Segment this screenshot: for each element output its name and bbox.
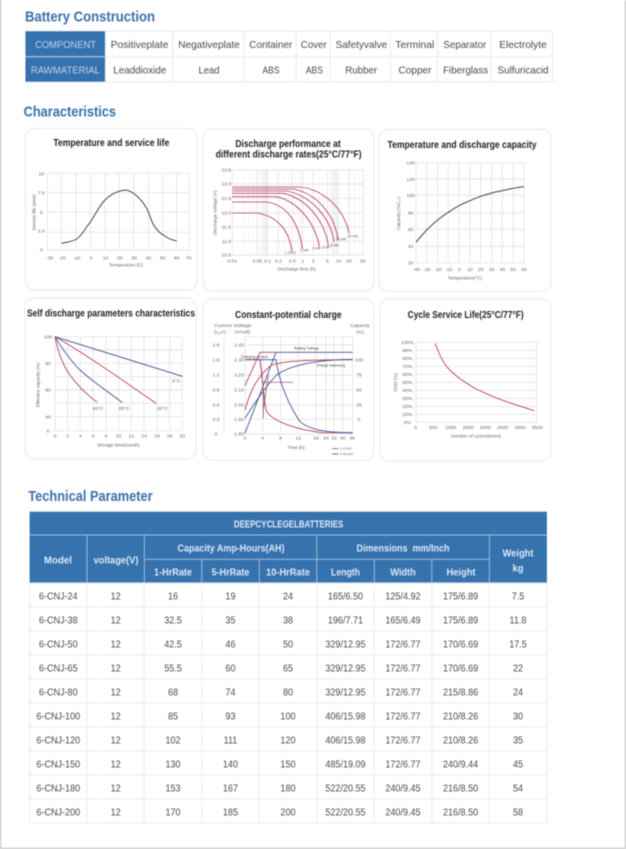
heading: Battery Construction: Battery Construction — [25, 8, 155, 26]
legend: 0.25C10A — [340, 452, 353, 456]
line chart: 30 — [489, 267, 495, 273]
table rows: 172/6.77 — [385, 639, 421, 651]
line chart: 100 — [355, 357, 363, 363]
table rows: 102 — [166, 735, 181, 747]
line chart: Storage time(month) — [97, 443, 140, 448]
heading: Technical Parameter: Technical Parameter — [28, 488, 153, 505]
line chart: Capacity (%C₁₀) — [396, 196, 401, 230]
row: raw material: Leaddioxide — [113, 65, 166, 77]
table header: 5-HrRate — [212, 566, 250, 578]
table rows: 130 — [166, 759, 181, 771]
line chart: 40 — [340, 436, 346, 442]
line chart: 20% — [402, 404, 413, 410]
table rows: 6-CNJ-38 — [39, 615, 78, 627]
row: raw material: Lead — [198, 65, 220, 77]
table rows: 6-CNJ-180 — [36, 783, 81, 795]
row: raw material: RAWMATERIAL — [31, 65, 100, 77]
line chart: 40°C — [92, 406, 104, 412]
line chart: 20 — [180, 434, 185, 440]
line chart: (%) — [356, 329, 364, 335]
line chart: Number of cycles(times) — [451, 434, 502, 439]
table rows: 170/6.69 — [443, 639, 478, 651]
line chart: 2.10 — [234, 387, 244, 393]
line chart: 3500 — [532, 425, 543, 431]
line chart: 16 — [154, 434, 160, 440]
line chart: 1.8 — [213, 342, 220, 348]
table rows: 406/15.98 — [325, 735, 366, 747]
line chart: -30 — [423, 267, 431, 273]
line chart: 5 — [40, 210, 43, 216]
line chart: 1.2 — [213, 372, 220, 378]
table rows: 80 — [283, 687, 294, 699]
line chart: 50 — [160, 255, 166, 261]
line chart: DOD (%) — [393, 372, 398, 392]
line chart: -20 — [59, 255, 66, 261]
line chart: 10 — [39, 171, 44, 177]
line chart: 8 — [279, 436, 282, 442]
line chart: Battery Voltage — [294, 347, 319, 351]
row: component — [35, 39, 547, 51]
table rows: 6-CNJ-80 — [39, 687, 78, 699]
line chart: 140 — [407, 161, 415, 167]
line chart: 60 — [45, 388, 51, 394]
line chart: 7.5 — [38, 190, 45, 196]
line chart: 30°C — [118, 406, 130, 412]
table header: Width — [390, 566, 416, 578]
line chart: discharge curves: 2 — [312, 258, 315, 264]
line chart: 2.30 — [234, 357, 244, 363]
line chart: 1.5 — [213, 357, 220, 363]
table rows: 329/12.95 — [325, 639, 366, 651]
table rows: 24 — [513, 687, 524, 699]
line chart: 0% — [404, 420, 411, 426]
line chart: 60 — [521, 267, 527, 273]
line chart: 20 — [408, 260, 414, 266]
line chart: Time (h) — [287, 445, 305, 450]
line chart: 2 — [66, 434, 69, 440]
table rows: 172/6.77 — [385, 735, 421, 747]
line chart: 100 — [407, 193, 415, 199]
row: component: Electrolyte — [499, 39, 547, 51]
line chart — [396, 161, 527, 281]
row: component: Negativeplate — [178, 39, 240, 51]
table rows: 175/6.89 — [443, 615, 478, 627]
table rows: 150 — [280, 759, 296, 771]
table rows: 175/6.89 — [443, 591, 478, 603]
row: component: Cover — [301, 39, 327, 51]
line chart: 80 — [45, 361, 51, 367]
table rows: 196/7.71 — [328, 615, 363, 627]
table rows: 172/6.77 — [385, 663, 421, 675]
table rows: 58 — [513, 807, 523, 819]
line chart: 40 — [45, 414, 51, 420]
table rows: 12 — [111, 759, 121, 771]
line chart: 70 — [186, 255, 192, 261]
line chart: 10 — [467, 267, 473, 273]
line chart: discharge curves: 20 — [346, 258, 352, 264]
line chart: discharge curves: 12.5 — [221, 196, 231, 202]
table header: Dimensions mm/Inch — [356, 543, 450, 555]
line chart: discharge curves: 0.01 — [227, 258, 237, 264]
line chart: discharge curves: 2 HR — [312, 247, 321, 251]
table rows: 42.5 — [164, 639, 182, 651]
line chart: discharge curves: 1.75 H — [285, 251, 296, 255]
line chart: 24 — [323, 436, 329, 442]
table rows: 35 — [513, 735, 523, 747]
table rows: 240/9.44 — [443, 759, 479, 771]
table rows: 17.5 — [509, 639, 527, 651]
table rows: 46 — [225, 639, 235, 651]
line chart — [36, 334, 185, 448]
table rows: 6-CNJ-65 — [39, 663, 78, 675]
line chart: 75 — [356, 372, 362, 378]
line chart: discharge curves: 0.5 — [289, 258, 296, 264]
line chart: discharge curves — [213, 168, 366, 271]
line chart: 120 — [407, 177, 415, 183]
line chart: discharge curves: Discharge time (h) — [278, 266, 316, 271]
line chart: -10 — [445, 267, 452, 273]
line chart: discharge curves: 3 HR — [322, 246, 331, 250]
line chart: 12 — [296, 436, 301, 442]
row: component: Separator — [443, 39, 487, 51]
table rows: 240/9.45 — [385, 807, 421, 819]
table rows: 6-CNJ-200 — [36, 807, 81, 819]
line chart: 12 — [129, 434, 134, 440]
row: raw material: Rubber — [345, 65, 378, 77]
line chart: 90% — [402, 348, 413, 354]
line chart: 50 — [510, 267, 516, 273]
line chart: 2500 — [497, 425, 508, 431]
table rows: 140 — [223, 759, 239, 771]
line chart: discharge curves: 20 HR — [347, 235, 358, 239]
table rows: 210/8.26 — [443, 711, 478, 723]
table rows: 111 — [224, 735, 237, 747]
table rows: 74 — [225, 687, 236, 699]
chart title: Temperature and discharge capacity — [387, 140, 537, 151]
line chart: -40 — [413, 267, 420, 273]
line chart: 4 — [79, 434, 82, 440]
table rows: 120 — [280, 735, 296, 747]
table rows: 167 — [223, 783, 238, 795]
line chart: 18 — [167, 434, 173, 440]
line chart: 40 — [146, 255, 151, 261]
table header: 10-HrRate — [266, 566, 310, 578]
panel: self discharge — [25, 298, 196, 459]
line chart — [213, 323, 370, 450]
row: component: Container — [249, 39, 293, 51]
table: battery construction — [26, 31, 552, 82]
row: raw material: ABS — [306, 65, 323, 77]
line chart: discharge curves: 10 — [336, 258, 342, 264]
table rows: 215/8.86 — [443, 687, 478, 699]
table header: Weight — [502, 547, 534, 559]
line chart: 1000 — [445, 425, 456, 431]
line chart: 2.5 — [38, 229, 45, 235]
panel: discharge performance — [203, 129, 374, 291]
line chart: 2.20 — [234, 372, 244, 378]
table rows: 6-CNJ-100 — [36, 711, 81, 723]
line chart: discharge curves: 0.05 — [252, 258, 262, 264]
line chart: 3000 — [514, 425, 526, 431]
line chart: 8 — [105, 434, 108, 440]
row: raw material: ABS — [262, 65, 280, 77]
table rows: 200 — [280, 807, 296, 819]
table rows: 7.5 — [512, 591, 524, 603]
table rows: 12 — [111, 807, 121, 819]
table rows: 30 — [513, 711, 524, 723]
table rows: 50 — [283, 639, 294, 651]
line chart: 0.3 — [213, 417, 220, 423]
line chart: -30 — [46, 255, 53, 261]
table rows: 522/20.55 — [325, 807, 366, 819]
table rows: 180 — [280, 783, 296, 795]
line chart: 4 — [261, 436, 264, 442]
table rows: 35 — [225, 615, 235, 627]
table rows: 55.5 — [164, 663, 182, 675]
line chart: -10 — [73, 255, 80, 261]
chart title: Self discharge parameters characteristics — [27, 309, 195, 320]
line chart: 50 — [356, 387, 362, 393]
row: raw material — [31, 65, 549, 77]
line chart — [393, 340, 543, 439]
line chart: discharge curves: 0.1 — [264, 258, 271, 264]
line chart: 20 — [478, 267, 484, 273]
table rows: 125/4.92 — [385, 591, 421, 603]
legend — [332, 447, 353, 456]
line chart: 2.00 — [234, 402, 244, 408]
row: raw material: Sulfuricacid — [498, 65, 549, 77]
panel: constant-potential charge — [203, 299, 374, 460]
chart title — [216, 139, 362, 161]
row: raw material: Copper — [398, 65, 432, 77]
line chart: Temperature(°C) — [448, 276, 483, 281]
table rows: 240/9.45 — [385, 783, 421, 795]
table rows: 216/8.50 — [443, 783, 479, 795]
heading: Characteristics: Characteristics — [24, 104, 116, 120]
table rows: 185 — [223, 807, 238, 819]
line chart: 100% — [401, 340, 414, 346]
line chart: discharge curves: 5 — [326, 258, 329, 264]
line chart: 100 — [44, 334, 52, 340]
line chart: discharge curves: 1 — [301, 258, 304, 264]
table rows: 172/6.77 — [385, 759, 421, 771]
panel: cycle service life — [380, 299, 551, 461]
line chart: Charge balancing — [316, 363, 345, 367]
table rows: 165/6.49 — [385, 615, 421, 627]
line chart: 2000 — [480, 425, 491, 431]
line chart: 10 — [116, 434, 122, 440]
line chart: 70% — [402, 364, 413, 370]
line chart: 80% — [402, 356, 413, 362]
line chart: discharge curves: 5 HR — [330, 243, 339, 247]
table rows: 172/6.77 — [385, 687, 421, 699]
line chart: Charging current — [241, 355, 268, 359]
line chart: 1500 — [462, 425, 474, 431]
line chart: Current Voltage — [214, 323, 252, 329]
line chart — [32, 171, 192, 268]
table rows: 6-CNJ-120 — [36, 735, 81, 747]
row: component: Safetyvalve — [336, 39, 387, 51]
line chart: 50% — [402, 380, 413, 386]
table rows: 12 — [111, 711, 121, 723]
line chart: 6 — [92, 434, 95, 440]
table rows: 11.8 — [510, 615, 526, 627]
table rows: 6-CNJ-24 — [39, 591, 78, 603]
line chart: 80 — [408, 210, 414, 216]
table rows: 6-CNJ-150 — [36, 759, 81, 771]
line chart: (I₁₀A) — [214, 329, 226, 335]
legend: 0.1C10A — [340, 447, 352, 451]
table rows: 153 — [166, 783, 181, 795]
line chart: 40% — [402, 388, 413, 394]
table rows: 485/19.09 — [325, 759, 366, 771]
line chart: 2.40 — [234, 342, 244, 348]
table rows: 93 — [225, 711, 235, 723]
line chart: 40 — [408, 244, 414, 250]
line chart: 0 — [47, 428, 50, 434]
table rows: 12 — [111, 735, 121, 747]
table rows: 85 — [168, 711, 178, 723]
table rows: 165/6.50 — [328, 591, 364, 603]
table rows: 24 — [283, 591, 294, 603]
line chart: Temperature (C) — [109, 263, 143, 268]
table rows: 329/12.95 — [325, 663, 366, 675]
table rows: 22 — [513, 663, 523, 675]
table header: DEEPCYCLEGELBATTERIES — [234, 518, 343, 530]
chart title: Discharge performance at — [235, 139, 341, 150]
table rows: 170 — [166, 807, 181, 819]
line chart: Capacity — [350, 323, 370, 329]
chart title: Temperature and service life — [53, 138, 170, 149]
table rows: 100 — [280, 711, 296, 723]
line chart: 500 — [429, 425, 438, 431]
line chart: discharge curves: 10 HR — [336, 238, 347, 242]
line chart: 5°C — [172, 379, 181, 385]
table header: Length — [331, 566, 360, 578]
line chart: 0 — [215, 432, 218, 438]
line chart: 16 — [313, 436, 319, 442]
chart title: Cycle Service Life(25°C/77°F) — [408, 310, 524, 321]
table rows: 32.5 — [164, 615, 182, 627]
line chart: 0.9 — [213, 387, 220, 393]
table header: Height — [446, 566, 476, 578]
line chart: 0 — [90, 255, 93, 261]
line chart: 32 — [331, 436, 337, 442]
line chart: Service life (year) — [32, 194, 37, 230]
row: component: Positiveplate — [111, 39, 169, 51]
table rows: 12 — [111, 687, 121, 699]
table rows: 12 — [111, 663, 121, 675]
table header: Model — [44, 555, 72, 567]
table rows: 12 — [111, 591, 121, 603]
line chart: 40 — [500, 267, 505, 273]
line chart: 1.90 — [234, 417, 244, 423]
line chart: discharge curves: 0.2 — [275, 258, 282, 264]
line chart: 30% — [402, 396, 413, 402]
line chart: discharge curves: 12.0 — [221, 210, 231, 216]
line chart: discharge curves: 11.5 — [222, 225, 231, 231]
table rows: 406/15.98 — [325, 711, 366, 723]
table rows: 54 — [513, 783, 524, 795]
table: technical parameter — [30, 512, 547, 823]
line chart: discharge curves: 13.5 — [221, 168, 231, 174]
line chart: 1.80 — [234, 432, 244, 438]
row: component: Terminal — [395, 39, 434, 51]
table rows: 210/8.26 — [443, 735, 478, 747]
line chart: 0.6 — [213, 402, 220, 408]
line chart: 0 — [244, 436, 247, 442]
line chart: 25 — [356, 402, 362, 408]
line chart: 30 — [131, 255, 137, 261]
line chart: (V/cell) — [235, 329, 251, 335]
line chart: discharge curves: 1 HR — [300, 249, 309, 253]
table rows: 12 — [111, 783, 121, 795]
table rows: 12 — [111, 639, 121, 651]
table rows: 60 — [225, 663, 236, 675]
table rows: 12 — [111, 615, 121, 627]
table rows: 65 — [283, 663, 293, 675]
table header — [30, 512, 547, 583]
line chart: 0 — [54, 434, 57, 440]
table rows: 38 — [283, 615, 293, 627]
line chart: 20°C — [157, 406, 169, 412]
line chart: Effective capacity (%) — [36, 362, 41, 407]
line chart: 10 — [103, 255, 109, 261]
line chart: 60 — [408, 227, 414, 233]
table rows: 19 — [225, 591, 235, 603]
line chart: 48 — [349, 436, 355, 442]
table header: voltage(V) — [94, 555, 138, 567]
line chart: 0 — [40, 248, 43, 254]
line chart: discharge curves: 11.0 — [222, 239, 231, 245]
panel: temperature and discharge capacity — [379, 130, 551, 292]
line chart: 60% — [402, 372, 413, 378]
line chart: discharge curves: Discharge voltage (V) — [213, 190, 218, 235]
table rows — [36, 591, 527, 819]
line chart: 10% — [402, 412, 413, 418]
line chart: discharge curves: 50 — [360, 258, 366, 264]
line chart: discharge curves: 10.5 — [221, 253, 231, 259]
table rows: 68 — [168, 687, 178, 699]
line chart: -20 — [434, 267, 442, 273]
panel: temperature and service life — [26, 128, 197, 290]
table rows: 6-CNJ-50 — [39, 639, 78, 651]
table rows: 172/6.77 — [385, 711, 421, 723]
line chart: 60 — [174, 255, 180, 261]
chart title: different discharge rates(25°C/77°F) — [216, 150, 362, 161]
line chart: discharge curves: 13.0 — [221, 182, 231, 188]
chart title: Constant-potential charge — [235, 310, 342, 321]
table rows: 45 — [513, 759, 523, 771]
line chart: 0 — [458, 267, 461, 273]
table rows: 16 — [168, 591, 178, 603]
line chart: 14 — [141, 434, 147, 440]
table rows: 522/20.55 — [325, 783, 366, 795]
row: component: COMPONENT — [35, 39, 97, 51]
table header: kg — [512, 563, 524, 575]
table rows: 216/8.50 — [443, 807, 479, 819]
table rows: 170/6.69 — [443, 663, 478, 675]
line chart: 0 — [414, 425, 417, 431]
table rows: 329/12.95 — [325, 687, 366, 699]
row: raw material: Fiberglass — [443, 65, 488, 77]
line chart: 0 — [358, 417, 361, 423]
table header: 1-HrRate — [154, 566, 192, 578]
table header: Capacity Amp-Hours(AH) — [178, 543, 284, 555]
line chart: 20 — [117, 255, 123, 261]
